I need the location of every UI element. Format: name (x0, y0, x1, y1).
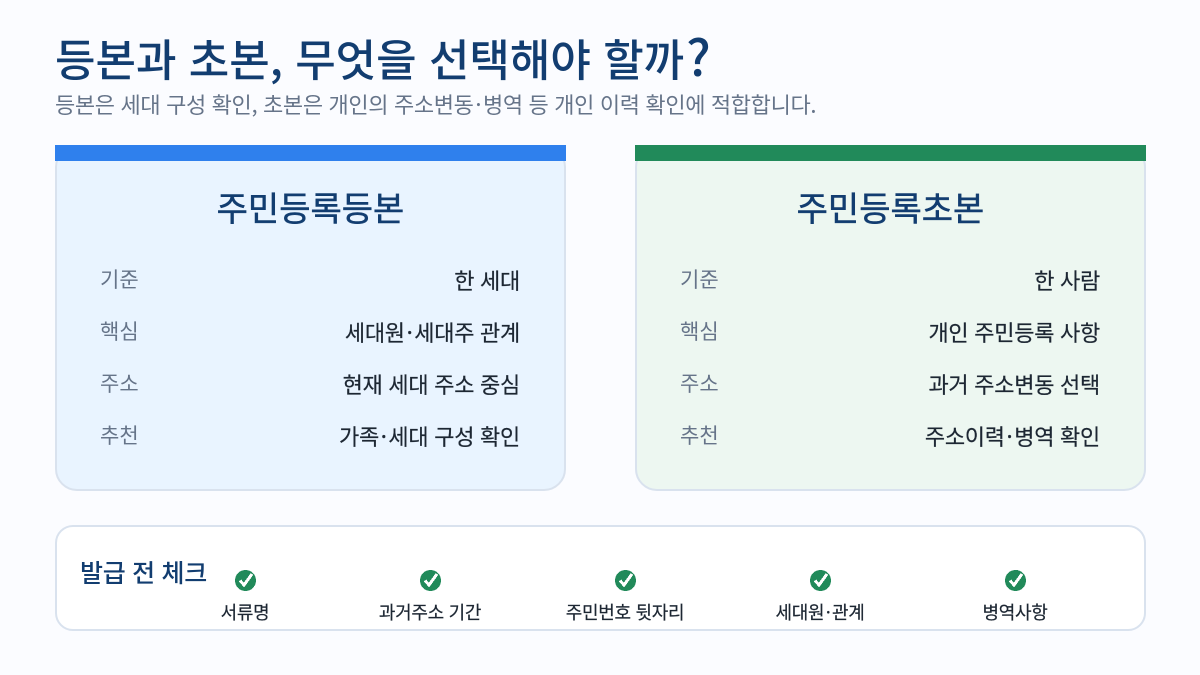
icon: check 병역사항 (1005, 570, 1026, 591)
label: 과거주소 기간: 과거주소 기간 (379, 599, 481, 625)
icon: check 주민번호 뒷자리 (615, 570, 636, 591)
row: 주소 value: 현재 세대 주소 중심 (343, 368, 520, 400)
panel accent bar (55, 145, 566, 161)
panel heading: 주민등록초본 (797, 182, 984, 231)
row: 기준 label: 기준 (100, 264, 139, 294)
row: 기준 label: 기준 (680, 264, 719, 294)
row: 주소 label: 주소 (680, 368, 719, 398)
panel: 발급 전 체크 (55, 525, 1146, 631)
row: 핵심 label: 핵심 (100, 316, 139, 346)
row: 핵심 label: 핵심 (680, 316, 719, 346)
row: 주소 value: 과거 주소변동 선택 (928, 368, 1100, 400)
panel background (55, 145, 566, 491)
row: 주소 label: 주소 (100, 368, 139, 398)
label: 주민번호 뒷자리: 주민번호 뒷자리 (566, 599, 684, 625)
row: 핵심 value: 세대원·세대주 관계 (345, 316, 520, 348)
icon: check 세대원·관계 (810, 570, 831, 591)
panel background (635, 145, 1146, 491)
row: 추천 value: 주소이력·병역 확인 (925, 420, 1100, 452)
row: 추천 label: 추천 (680, 420, 719, 450)
row: 기준 value: 한 세대 (454, 264, 520, 296)
panel heading: 주민등록등본 (217, 182, 404, 231)
icon: check 서류명 (235, 570, 256, 591)
row: 기준 value: 한 사람 (1034, 264, 1100, 296)
panel: 주민등록등본 (55, 145, 566, 491)
panel accent bar (635, 145, 1146, 161)
title: 등본과 초본, 무엇을 선택해야 할까? (55, 19, 711, 91)
subtitle: 등본은 세대 구성 확인, 초본은 개인의 주소변동·병역 등 개인 이력 확인에 적합합니다. (55, 88, 816, 120)
row: 핵심 value: 개인 주민등록 사항 (928, 316, 1100, 348)
label: 세대원·관계: 세대원·관계 (775, 599, 865, 625)
icon: check 과거주소 기간 (420, 570, 441, 591)
row: 추천 label: 추천 (100, 420, 139, 450)
label: 서류명: 서류명 (221, 599, 269, 625)
row: 추천 value: 가족·세대 구성 확인 (339, 420, 520, 452)
label: 병역사항: 병역사항 (982, 599, 1048, 625)
panel: 주민등록초본 (635, 145, 1146, 491)
checklist heading: 발급 전 체크 (80, 554, 207, 590)
